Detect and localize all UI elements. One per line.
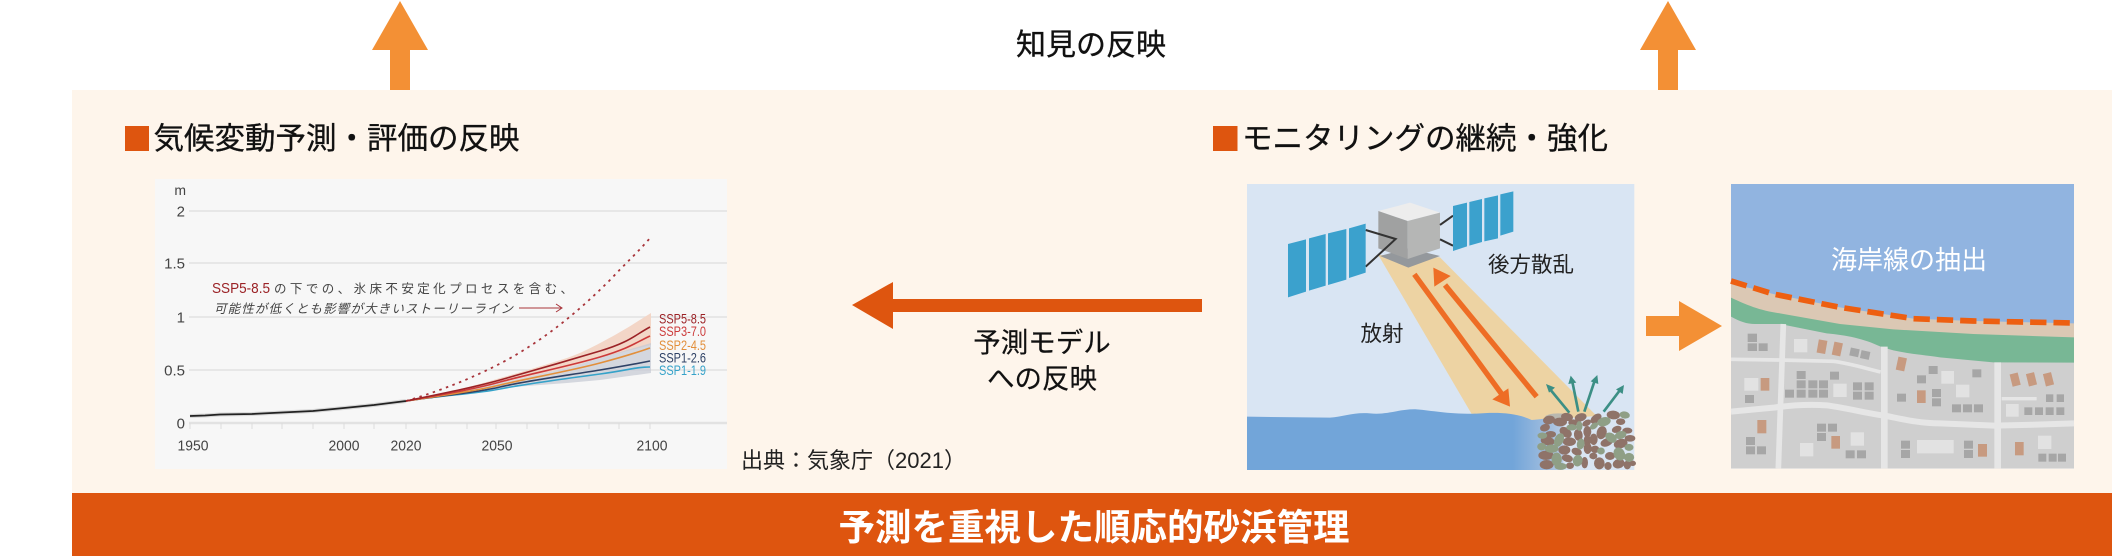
scenario labels: SSP2-4.5 [659,338,706,353]
y axis labels [164,182,186,432]
label: shoreline extraction: 海岸線の抽出 [1831,245,1987,275]
text: knowledge feedback: 知見の反映 [1016,29,1166,62]
annotation [212,280,573,316]
annotation: の下での、氷床不安定化プロセスを含む、 [274,282,573,296]
scenario lines [406,327,650,401]
arrow: satellite to map [1646,301,1722,351]
scatter arrows [1546,375,1624,413]
text: source: 出典：気象庁（2021） [741,448,966,473]
green strip [1731,298,2074,370]
text: reflect to prediction model: 予測モデル [973,327,1111,358]
brown buildings [1757,339,2054,457]
radar beam [1378,255,1597,421]
y axis labels: 1.5 [164,256,185,272]
x axis labels: 2050 [482,438,512,454]
y axis labels: 1 [177,310,185,326]
scenario labels: SSP3-7.0 [659,324,706,339]
sea [1247,409,1563,470]
panel: shoreline extraction map [1731,184,2074,468]
arrow: reflect to prediction model [852,282,1202,329]
heading: climate prediction: 気候変動予測・評価の反映 [154,122,520,156]
x axis labels: 2020 [390,438,422,454]
x axis labels: 2100 [636,438,668,454]
roads [1731,324,2074,468]
beach [1731,283,2074,340]
annotation: 可能性が低くとも影響が大きいストーリーライン [214,302,514,316]
y axis labels: 2 [177,204,185,220]
banner: adaptive beach management [72,493,2112,556]
historic line [190,401,406,416]
x axis labels: 1950 [178,438,208,454]
scenario labels: SSP1-2.6 [659,350,706,366]
annotation: SSP5-8.5 [212,280,270,297]
y axis labels: m [174,182,186,198]
banner: adaptive beach management: 予測を重視した順応的砂浜管理 [838,507,1350,548]
uncertainty bands [406,313,651,401]
satellite [1288,191,1513,297]
x axis labels [178,438,668,454]
panel: satellite illustration [1247,184,1635,470]
y axis labels: 0 [177,416,185,432]
light buildings [1744,339,2051,456]
scenario labels: SSP5-8.5 [659,312,706,326]
arrow: right upward [1640,1,1696,90]
heading: monitoring: モニタリングの継続・強化 [1242,122,1608,156]
land [1731,317,2074,468]
gray buildings [1745,334,2066,462]
scenario labels: SSP1-1.9 [659,363,706,378]
scenario labels [659,312,706,378]
chart: sea level rise projection [155,179,727,469]
text: reflect to prediction model: への反映 [987,363,1097,394]
extracted shoreline [1731,281,2074,323]
low-likelihood dotted line [406,238,650,401]
arrow: left upward [372,1,428,90]
rocks [1545,413,1572,421]
x axis labels: 2000 [328,438,360,454]
panel: background [72,90,2112,493]
label: backscatter: 後方散乱 [1488,253,1574,277]
emission and backscatter arrows [1414,268,1537,407]
y axis labels: 0.5 [164,362,185,380]
label: emission: 放射 [1360,322,1404,346]
text: reflect to prediction model [973,327,1111,394]
